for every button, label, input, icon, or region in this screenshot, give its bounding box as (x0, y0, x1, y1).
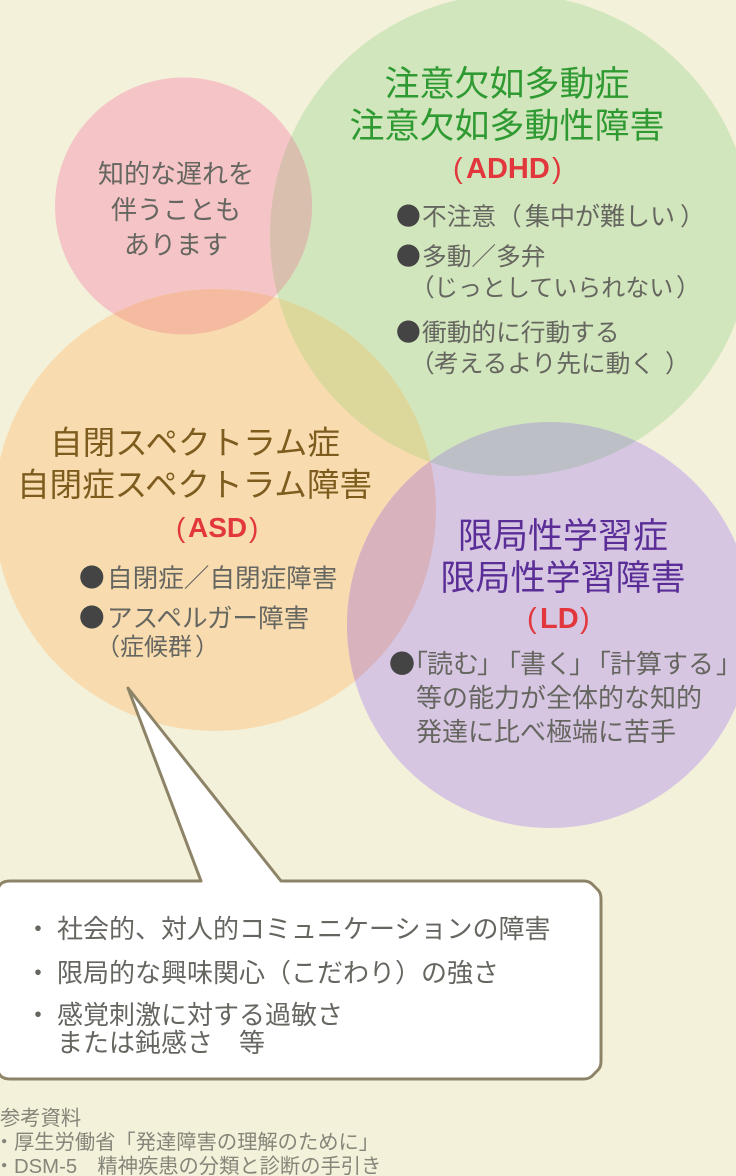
abbreviation: ADHD: ) (552, 153, 562, 185)
text: LD description: 発達に比べ極端に苦手 (416, 717, 676, 747)
list: ASD types: ● (79, 558, 105, 595)
heading: LD: 限局性学習症 (458, 517, 668, 556)
list: ADHD traits: ● (396, 313, 421, 349)
list: ADHD traits: 考えるより先に動く (434, 350, 655, 378)
circle: ASD (0, 289, 436, 731)
text: LD description: 書く (520, 649, 572, 679)
list: ASD types (79, 558, 337, 661)
list: ADHD traits: ） (680, 203, 705, 231)
circle: ADHD (270, 0, 736, 476)
overlap: ADHD and ASD (278, 298, 430, 462)
abbreviation: ASD: ASD (188, 512, 247, 543)
references: 参考資料 (0, 1107, 81, 1130)
list: ADHD traits: 衝動的に行動する (422, 319, 620, 347)
heading: LD (440, 517, 686, 598)
callout text: 社会的、対人的コミュニケーションの障害 (57, 914, 550, 944)
heading: ASD: 自閉症スペクトラム障害 (17, 466, 372, 503)
list: ADHD traits: じっとしていられない (434, 275, 673, 302)
callout text: または鈍感さ 等 (57, 1028, 265, 1058)
overlap: ASD and LD (347, 461, 436, 681)
list: ADHD traits: 集中が難しい (525, 203, 675, 231)
references: 厚生労働省「発達障害の理解のために」 (14, 1131, 379, 1154)
list: ADHD traits: 不注意 (422, 203, 496, 231)
list: ADHD traits: 多動／多弁 (422, 243, 545, 271)
callout text: 限局的な興味関心（こだわり）の強さ (57, 958, 499, 988)
text: LD description: 「 (585, 649, 611, 679)
circle: LD (347, 422, 736, 828)
abbreviation: LD: ) (580, 603, 590, 635)
abbreviation: LD: ( (527, 603, 537, 635)
heading: LD: 限局性学習障害 (440, 559, 686, 598)
list: ASD types: ） (195, 634, 219, 661)
list: ASD types: ● (79, 598, 105, 635)
heading: ADHD: 注意欠如多動性障害 (349, 107, 665, 146)
text: intellectual disability: 伴うことも (111, 195, 241, 225)
text: LD description: 」 (477, 649, 503, 679)
callout text: ・ (25, 995, 51, 1032)
text: intellectual disability: あります (124, 230, 228, 260)
list: ASD types: （ (96, 634, 120, 661)
text: LD description: ● (389, 644, 415, 681)
list: ADHD traits: ） (665, 350, 690, 378)
abbreviation: LD: LD (540, 603, 579, 635)
callout text: ・ (25, 909, 51, 946)
text: LD description (389, 644, 736, 747)
callout: ASD characteristics (0, 688, 601, 1079)
abbreviation: ADHD: ( (453, 153, 463, 185)
list: ADHD traits: ● (396, 237, 421, 273)
text: LD description: 「 (402, 649, 428, 679)
list: ASD types: 症候群 (120, 634, 192, 661)
list: ADHD traits: （ (497, 203, 522, 231)
panel text: ASD (17, 424, 372, 661)
heading: ADHD (349, 65, 665, 146)
text: LD description: 「 (495, 649, 521, 679)
list: ADHD traits: ● (396, 197, 421, 233)
text: LD description: 等の能力が全体的な知的 (416, 683, 702, 713)
references (0, 1107, 381, 1176)
heading: ASD: 自閉スペクトラム症 (50, 424, 340, 461)
list: ADHD traits: ） (676, 274, 701, 302)
text: LD description: 」 (569, 649, 595, 679)
list: ASD types: 自閉症／自閉症障害 (107, 564, 337, 593)
text: LD description: 計算する (610, 649, 714, 679)
circle: intellectual disability (55, 78, 312, 334)
callout text (25, 909, 550, 1058)
text: intellectual disability: 知的な遅れを (98, 159, 254, 189)
overlap: intellectual disability and ADHD (270, 136, 312, 294)
list: ADHD traits (396, 197, 705, 378)
list: ADHD traits: （ (410, 350, 435, 378)
text: intellectual disability (98, 159, 254, 260)
list: ASD types: アスペルガー障害 (107, 604, 309, 633)
text: LD description: 読む (427, 649, 479, 679)
overlap: ADHD and LD (430, 422, 636, 476)
panel text: LD (389, 517, 736, 747)
heading: ASD (17, 424, 372, 503)
callout text: 感覚刺激に対する過敏さ (57, 1000, 343, 1030)
abbreviation: ADHD: ADHD (466, 153, 550, 185)
heading: ADHD: 注意欠如多動症 (384, 65, 630, 104)
callout text: ・ (25, 953, 51, 990)
overlap: intellectual disability and ASD (114, 289, 274, 334)
abbreviation: ASD: ( (176, 512, 186, 543)
panel text: ADHD (349, 65, 705, 378)
list: ADHD traits: （ (410, 274, 435, 302)
speech bubble (0, 688, 601, 1079)
abbreviation: ASD: ) (249, 512, 258, 543)
